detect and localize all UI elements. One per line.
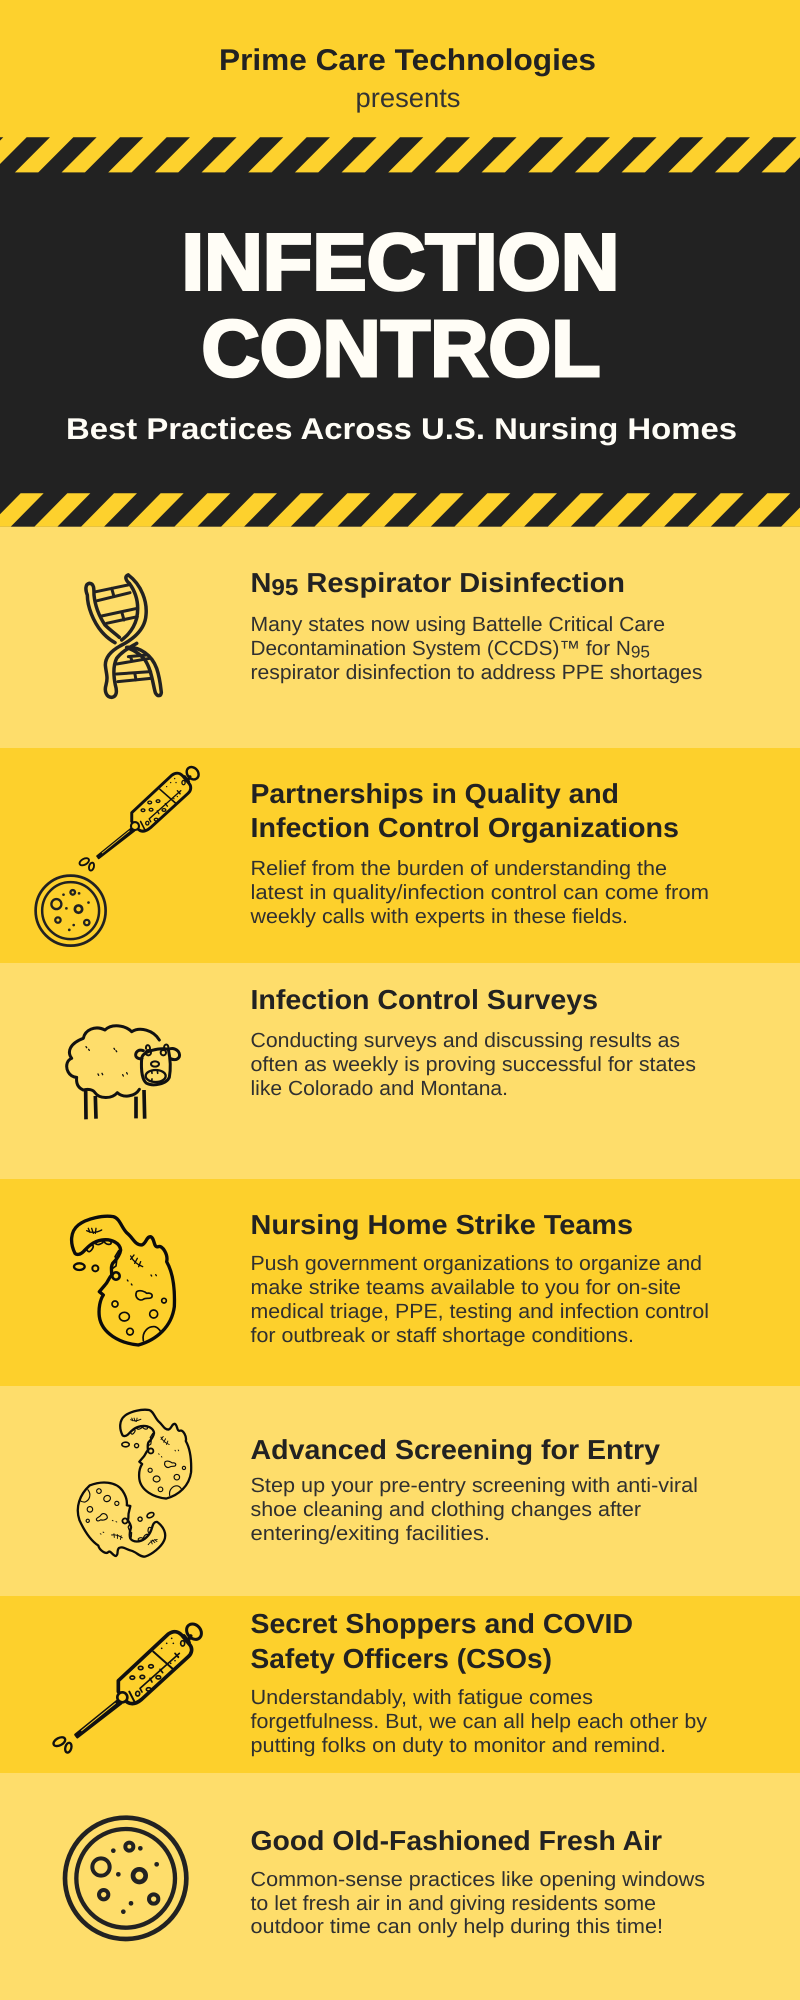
body text: entering/exiting facilities. bbox=[250, 1522, 490, 1545]
body text: outdoor time can only help during this time! bbox=[250, 1915, 663, 1938]
panel: N95 respirator disinfection bbox=[0, 527, 800, 748]
body text: putting folks on duty to monitor and remind. bbox=[250, 1734, 666, 1757]
body text: Decontamination System (CCDS)™ for N bbox=[250, 637, 626, 660]
subtitle: Best Practices Across U.S. Nursing Homes bbox=[66, 413, 737, 446]
body text: like Colorado and Montana. bbox=[250, 1077, 508, 1100]
body text: latest in quality/infection control can come from bbox=[250, 881, 709, 904]
title line 1: INFECTION bbox=[182, 218, 620, 306]
icon: upper germ bbox=[120, 1410, 191, 1499]
body text: for outbreak or staff shortage conditions. bbox=[250, 1324, 634, 1347]
panel: advanced screening for entry bbox=[0, 1386, 800, 1596]
body text: shoe cleaning and clothing changes after bbox=[250, 1498, 641, 1521]
icon: syringe with drops bbox=[52, 1621, 204, 1753]
body text: Push government organizations to organize and bbox=[250, 1252, 702, 1275]
body text bbox=[250, 1029, 696, 1100]
body text: respirator disinfection to address PPE shortages bbox=[250, 661, 702, 684]
body text: Common-sense practices like opening windows bbox=[250, 1868, 705, 1891]
body text: make strike teams available to you for on-site bbox=[250, 1276, 681, 1299]
body text: Many states now using Battelle Critical Care bbox=[250, 613, 665, 636]
heading: Good Old-Fashioned Fresh Air bbox=[250, 1825, 662, 1856]
body text: Step up your pre-entry screening with anti-viral bbox=[250, 1474, 698, 1497]
body text bbox=[250, 613, 702, 684]
heading: Secret Shoppers and COVID bbox=[250, 1608, 633, 1639]
heading bbox=[250, 1608, 633, 1674]
panel: infection control surveys bbox=[0, 963, 800, 1179]
body text: weekly calls with experts in these fields. bbox=[249, 905, 628, 928]
heading: Infection Control Surveys bbox=[250, 984, 598, 1015]
hazard stripes top bbox=[0, 137, 800, 173]
body text: to let fresh air in and giving residents some bbox=[250, 1892, 656, 1915]
heading: Respirator Disinfection bbox=[298, 567, 625, 598]
body text: Conducting surveys and discussing results as bbox=[250, 1029, 680, 1052]
body text bbox=[250, 1252, 709, 1347]
body text: medical triage, PPE, testing and infection control bbox=[250, 1300, 709, 1323]
body text: 95 bbox=[631, 642, 650, 662]
icon: dividing germ bbox=[72, 1216, 174, 1345]
body text: Relief from the burden of understanding the bbox=[250, 857, 667, 880]
heading: Partnerships in Quality and bbox=[250, 778, 619, 809]
title panel bbox=[0, 137, 800, 527]
panel: secret shoppers and COVID safety officers bbox=[0, 1596, 800, 1773]
icon: lower germ bbox=[67, 1465, 171, 1576]
heading: N bbox=[250, 567, 270, 598]
panel: nursing home strike teams bbox=[0, 1179, 800, 1386]
icon: sheep bbox=[67, 1026, 180, 1119]
body text: Understandably, with fatigue comes bbox=[250, 1686, 593, 1709]
heading: Infection Control Organizations bbox=[250, 812, 679, 843]
title line 2: CONTROL bbox=[202, 304, 600, 393]
icon: large petri dish bbox=[65, 1818, 186, 1939]
presenter name: Prime Care Technologies bbox=[219, 44, 596, 77]
heading: Advanced Screening for Entry bbox=[250, 1434, 661, 1465]
heading: 95 bbox=[271, 574, 299, 600]
body text bbox=[250, 1868, 705, 1938]
heading: Nursing Home Strike Teams bbox=[250, 1209, 633, 1240]
body text bbox=[249, 857, 709, 928]
heading bbox=[250, 778, 679, 843]
body text: often as weekly is proving successful for states bbox=[250, 1053, 696, 1076]
heading: Safety Officers (CSOs) bbox=[250, 1643, 552, 1674]
icon: DNA helix bbox=[86, 575, 161, 697]
hazard stripes bottom bbox=[0, 493, 800, 527]
panel: good old-fashioned fresh air bbox=[0, 1773, 800, 2000]
header band: presenter bbox=[0, 0, 800, 138]
icon: petri dish bbox=[36, 876, 106, 946]
body text: forgetfulness. But, we can all help each other by bbox=[250, 1710, 708, 1733]
body text bbox=[250, 1686, 708, 1757]
body text bbox=[250, 1474, 698, 1545]
panel: partnerships in quality and infection control organizations bbox=[0, 748, 800, 963]
presents label: presents bbox=[356, 83, 460, 113]
icon: syringe bbox=[78, 765, 201, 871]
